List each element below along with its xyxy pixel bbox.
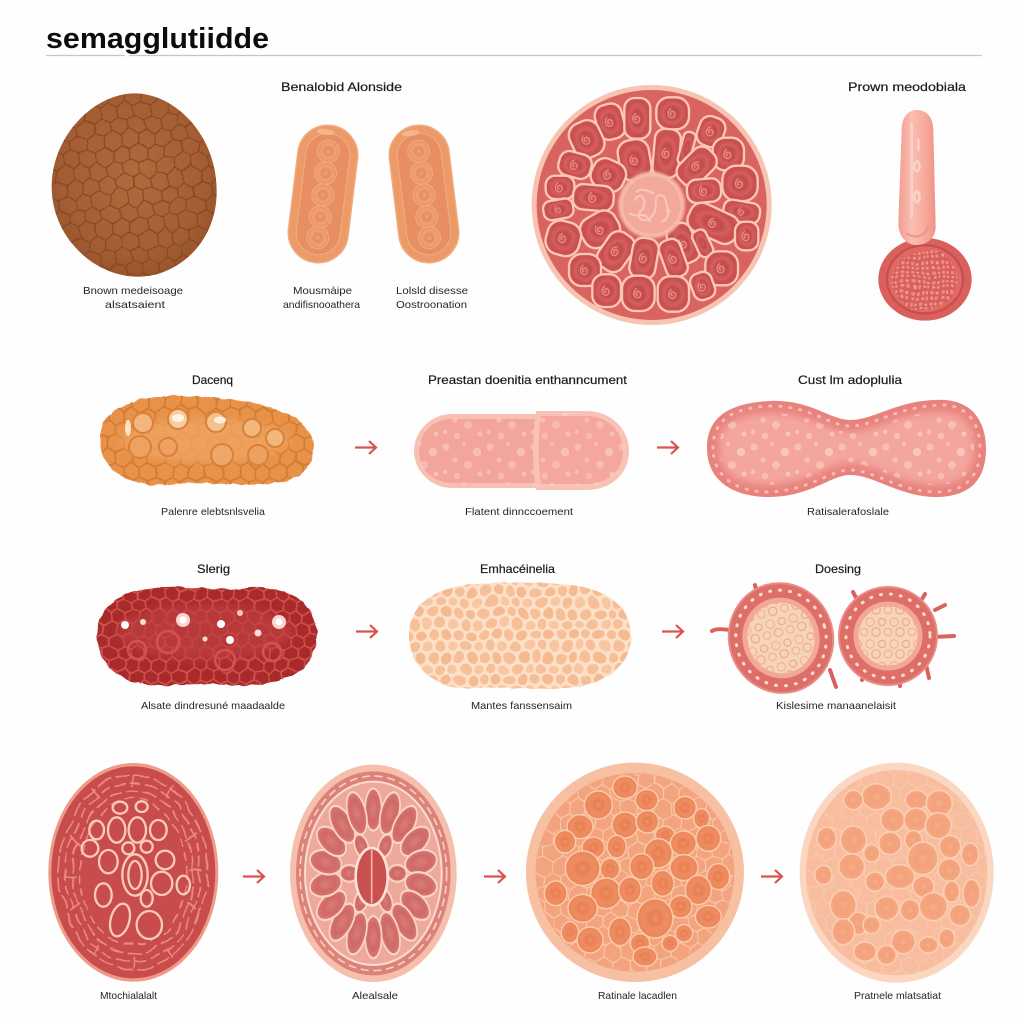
- illustration: brown round organ: [52, 93, 217, 277]
- caption: peach blob: Mantes fanssensaim: [471, 700, 572, 712]
- caption: orange blob: Palenre elebtsnlsvelia: [161, 506, 265, 518]
- heading: Preastan doenitia enthanncument: Preastan doenitia enthanncument: [428, 373, 628, 387]
- arrow: [662, 625, 683, 638]
- heading: Dacenq: Dacenq: [192, 373, 233, 387]
- caption: spiked cells: Kislesime manaanelaisit: [776, 700, 896, 712]
- illustration: left orange capsule: [285, 122, 361, 266]
- illustration: large radial cell cross-section: [532, 85, 772, 325]
- illustration: dark red lobed blob: [96, 586, 318, 687]
- illustration: elongated capsule on round base: [878, 110, 972, 321]
- illustration: paired spiked cells: [712, 571, 954, 705]
- illustration: two-part pink pill: [410, 410, 630, 490]
- arrow: [355, 441, 376, 454]
- illustration: right orange capsule: [386, 122, 462, 266]
- caption: right capsule: [396, 285, 468, 311]
- illustration: red oval with labyrinth cells: [48, 763, 218, 982]
- arrow: [761, 870, 782, 883]
- caption: brown organ: alsatsaient: [105, 299, 165, 311]
- caption: pink pill: Flatent dinnccoement: [465, 506, 573, 518]
- title: semagglutiidde: [46, 23, 269, 55]
- caption: pale cluster: Pratnele mlatsatiat: [854, 990, 941, 1002]
- arrow: [484, 870, 505, 883]
- caption: brown organ: Bnown medeisoage: [83, 285, 183, 297]
- caption: dumbbell: Ratisalerafoslale: [807, 506, 889, 518]
- caption: brown organ: [83, 285, 183, 311]
- caption: pink oval: Alealsale: [352, 990, 398, 1002]
- heading: Benalobid Alonside: Benalobid Alonside: [281, 80, 402, 94]
- heading: Slerig: Slerig: [197, 562, 230, 576]
- caption: left capsule: [283, 285, 360, 311]
- caption: right capsule: Oostroonation: [396, 299, 467, 311]
- illustration: pale peach circular cell cluster: [800, 763, 994, 983]
- illustration: orange circular cell cluster: [526, 763, 744, 982]
- caption: left capsule: Mousmàipe: [293, 285, 352, 297]
- caption: right capsule: Lolsld disesse: [396, 285, 468, 297]
- illustration: peach honeycomb blob: [409, 582, 632, 690]
- heading: Doesing: Doesing: [815, 562, 861, 576]
- illustration: pink dumbbell-shaped body: [705, 400, 990, 500]
- arrow: [356, 625, 377, 638]
- heading: Cust lm adoplulia: Cust lm adoplulia: [798, 373, 902, 387]
- illustration: pink oval with radial chambers: [290, 765, 457, 982]
- heading: Prown meodobiala: Prown meodobiala: [848, 80, 966, 94]
- arrow: [657, 441, 678, 454]
- caption: left capsule: andifisnooathera: [283, 299, 360, 311]
- heading: Emhacéinelia: Emhacéinelia: [480, 562, 555, 576]
- arrow: [243, 870, 264, 883]
- caption: orange cluster: Ratinale lacadlen: [598, 990, 677, 1002]
- caption: red oval: Mtochialalalt: [100, 990, 157, 1002]
- caption: dark red blob: Alsate dindresuné maadaalde: [141, 700, 285, 712]
- illustration: orange lobed blob: [100, 394, 314, 486]
